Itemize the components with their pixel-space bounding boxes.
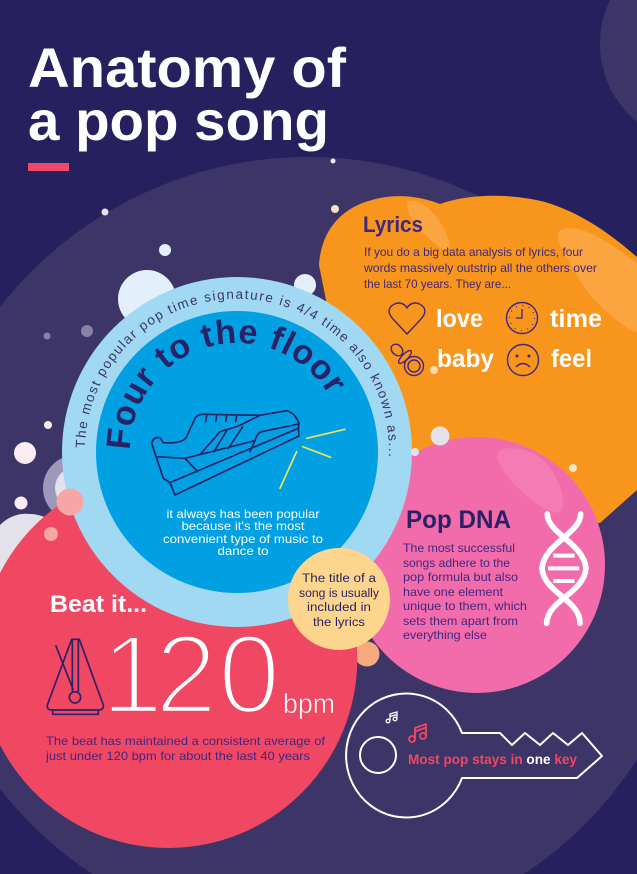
lyrics body: the last 70 years. They are... bbox=[364, 277, 511, 291]
bubbles over panels bbox=[44, 366, 577, 541]
top right circle bbox=[600, 0, 637, 122]
120 number: 120 bbox=[101, 612, 280, 737]
bubble beside red circle bbox=[354, 642, 380, 666]
ring curved text: The most popular pop time signature is 4/4 time also known as... bbox=[76, 290, 396, 456]
blue circle body text: convenient type of music to bbox=[163, 532, 323, 546]
pop DNA body: pop formula but also bbox=[403, 570, 518, 584]
orange blob bbox=[319, 196, 637, 523]
icon: heart bbox=[389, 303, 425, 334]
pink highlight bbox=[497, 448, 563, 513]
pop DNA body: songs adhere to the bbox=[403, 556, 510, 570]
curved heading: Four to the floor bbox=[106, 319, 344, 448]
lyrics body: If you do a big data analysis of lyrics, four bbox=[364, 245, 583, 259]
pop DNA body: unique to them, which bbox=[403, 599, 527, 613]
outer ring bbox=[62, 277, 412, 627]
pop DNA body: The most successful bbox=[403, 541, 515, 555]
word: feel: feel bbox=[551, 345, 592, 373]
lyrics heading: Lyrics bbox=[363, 212, 423, 237]
panel: lyrics bbox=[319, 196, 637, 523]
icon: clock bbox=[506, 302, 538, 334]
pop DNA heading: Pop DNA bbox=[406, 506, 511, 534]
callout: title in lyrics bbox=[288, 548, 390, 650]
panel: four to the floor bbox=[62, 277, 412, 627]
beat body bbox=[45, 734, 326, 763]
key text: Most pop stays in one key bbox=[408, 751, 577, 767]
pop DNA body: have one element bbox=[403, 585, 504, 599]
callout: title in lyrics: song is usually bbox=[299, 588, 379, 600]
icon: DNA helix bbox=[542, 514, 586, 623]
inner circle bbox=[96, 311, 378, 593]
lyrics body bbox=[363, 245, 597, 291]
key bbox=[346, 694, 602, 818]
title bbox=[28, 36, 346, 152]
word: love: love bbox=[436, 305, 483, 333]
icon: pacifier bbox=[389, 342, 424, 376]
blue circle body text bbox=[163, 507, 323, 558]
icon: shoe bbox=[152, 411, 299, 495]
word: baby: baby bbox=[437, 345, 494, 373]
pop DNA body: everything else bbox=[403, 628, 487, 642]
decorative bubbles bbox=[0, 158, 339, 600]
icon: sad face bbox=[508, 344, 538, 376]
pink circle bbox=[349, 437, 605, 693]
callout: title in lyrics: included in bbox=[307, 602, 371, 614]
title: a pop song bbox=[28, 89, 329, 152]
icon: metronome bbox=[47, 639, 103, 714]
panel: pop DNA bbox=[349, 437, 605, 693]
blue circle body text: it always has been popular bbox=[166, 507, 320, 521]
key hole bbox=[360, 737, 396, 773]
word: time: time bbox=[550, 305, 602, 333]
callout: title in lyrics: The title of a bbox=[302, 573, 377, 585]
blue circle body text: because it's the most bbox=[182, 519, 305, 533]
bpm unit: bpm bbox=[283, 688, 335, 719]
blue circle body text: dance to bbox=[218, 544, 269, 558]
blob highlights bbox=[407, 201, 450, 251]
title underline bbox=[28, 163, 69, 171]
beat body: just under 120 bpm for about the last 40 years bbox=[45, 749, 310, 763]
callout: title in lyrics: the lyrics bbox=[313, 617, 365, 629]
title: Anatomy of bbox=[28, 36, 346, 99]
yellow motion lines bbox=[280, 429, 345, 488]
key outline bbox=[346, 694, 602, 818]
pop DNA body bbox=[403, 541, 527, 642]
panel: beat it bbox=[0, 470, 357, 848]
icon: red music note bbox=[409, 724, 426, 742]
icon: small music note bbox=[386, 712, 397, 723]
beat heading: Beat it... bbox=[50, 591, 147, 618]
beat body: The beat has maintained a consistent average of bbox=[46, 734, 326, 748]
red circle bbox=[0, 470, 357, 848]
lyrics body: words massively outstrip all the others over bbox=[363, 261, 597, 275]
pop DNA body: sets them apart from bbox=[403, 614, 518, 628]
